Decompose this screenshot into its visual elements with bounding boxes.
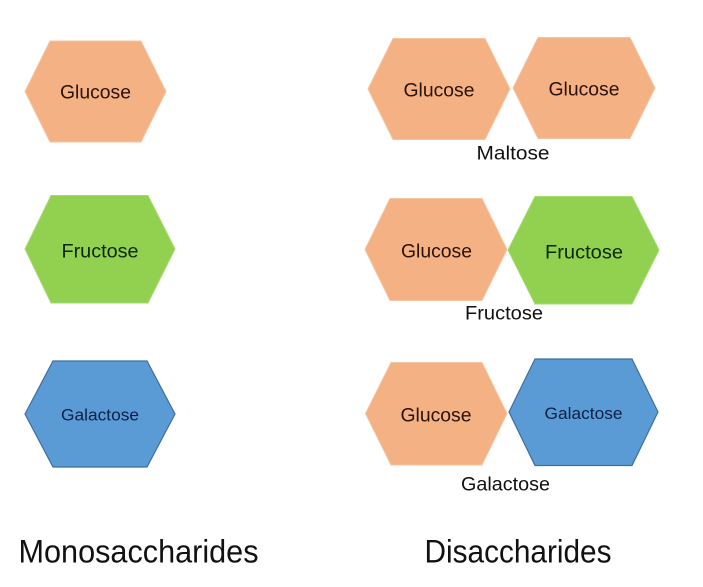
panel: glucose and galactose (366, 359, 658, 496)
panel: glucose and fructose (365, 196, 659, 324)
hexagon: fructose (25, 196, 175, 303)
hexagon: glucose: Glucose (404, 80, 474, 102)
panel: monosaccharides (25, 41, 175, 467)
hexagon: glucose (513, 38, 655, 138)
hexagon: glucose (25, 41, 166, 142)
label: fructose: Fructose (465, 302, 543, 324)
hexagon: galactose: Galactose (544, 404, 622, 423)
hexagon: galactose (25, 361, 175, 467)
panel: maltose (368, 38, 655, 164)
hexagon: glucose: Glucose (548, 78, 620, 100)
hexagon: glucose: Glucose (60, 82, 131, 104)
hexagon: glucose: Glucose (401, 240, 472, 262)
label: galactose: Galactose (461, 474, 550, 496)
hexagon: galactose (509, 359, 658, 466)
hexagon: galactose: Galactose (61, 406, 139, 424)
heading: disaccharides: Disaccharides (424, 534, 612, 570)
hexagon: fructose: Fructose (545, 242, 623, 264)
hexagon: glucose: Glucose (400, 404, 472, 426)
hexagon: fructose: Fructose (62, 240, 138, 262)
hexagon: glucose (366, 362, 507, 465)
heading: monosaccharides: Monosaccharides (18, 534, 258, 570)
label: maltose: Maltose (476, 142, 550, 164)
hexagon: glucose (368, 38, 510, 140)
hexagon: glucose (365, 198, 507, 300)
hexagon: fructose (508, 196, 659, 304)
